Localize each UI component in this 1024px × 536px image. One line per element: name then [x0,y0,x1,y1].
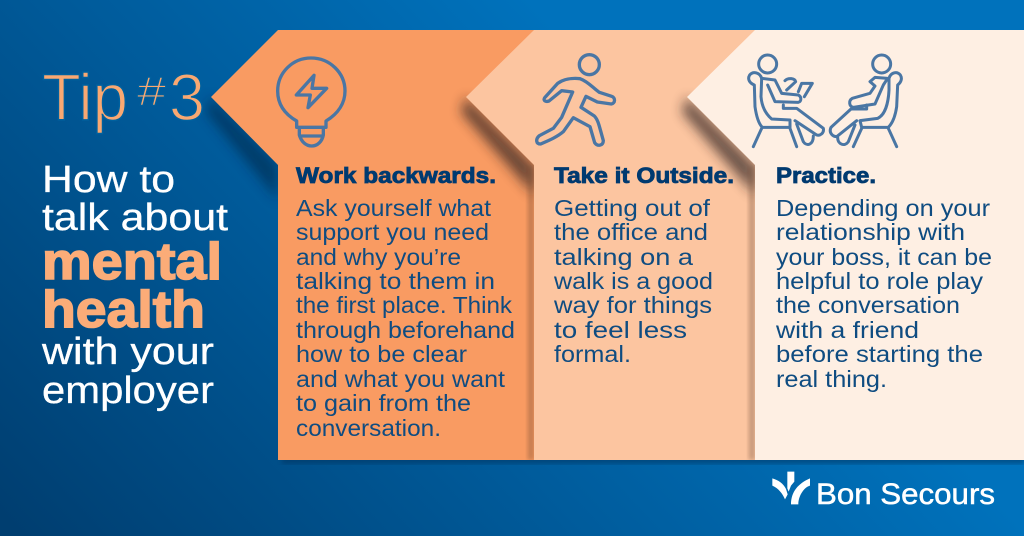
shadow of cream panel arrow [682,97,755,460]
text: work backwards: through beforehand [296,317,515,343]
text: practice: Depending on your [776,195,990,221]
icon: left seated person with notebook [749,55,823,147]
title: Tip #3: 3 [169,60,205,134]
text: practice: before starting the [776,341,983,367]
text: take it outside: the office and [554,219,708,245]
text: work backwards: Ask yourself what [296,195,491,221]
text: take it outside: to feel less [554,317,687,343]
text: work backwards: how to be clear [296,341,467,367]
heading: how to talk about mental health with your employer: health [42,281,205,339]
title: Tip #3 [42,60,205,134]
text: practice: the conversation [776,292,960,318]
panel: practice [687,30,1024,460]
text: work backwards: conversation. [296,415,441,441]
logo mark [772,472,810,504]
text: practice: relationship with [776,219,965,245]
shadow of peach panel arrow [461,97,534,460]
text: work backwards: to gain from the [296,390,471,416]
panel shadow below cards [281,460,1024,465]
shadow of orange panel arrow [206,97,278,200]
text: work backwards: and what you want [296,366,505,392]
logo: Bon Secours [772,472,995,511]
text: work backwards [296,163,515,441]
logo wordmark: Bon Secours [816,478,995,511]
text: take it outside: formal. [554,341,631,367]
text: practice: Practice. [776,163,876,188]
icon: two people seated in conversation [749,55,901,147]
text: take it outside: walk is a good [553,268,713,294]
heading: how to talk about mental health with your employer: employer [42,370,214,412]
text: take it outside: Getting out of [554,195,711,221]
heading: how to talk about mental health with your employer: How to [42,159,175,201]
text: work backwards: talking to them in [296,268,495,294]
title: Tip #3: # [137,68,166,114]
text: take it outside [553,163,734,367]
text: practice: your boss, it can be [776,244,992,270]
panel: take it outside [466,30,755,460]
text: practice [775,163,992,392]
text: practice: real thing. [776,366,887,392]
icon: light bulb with lightning bolt [278,58,345,146]
text: practice: helpful to role play [776,268,983,294]
text: take it outside: Take it Outside. [554,163,734,188]
text: practice: with a friend [775,317,919,343]
heading: how to talk about mental health with your employer: mental [42,233,222,291]
panel: work backwards [211,30,534,460]
text: take it outside: way for things [553,292,712,318]
heading: how to talk about mental health with your employer: talk about [42,197,228,239]
text: work backwards: support you need [296,219,489,245]
title: Tip #3: Tip [42,60,128,134]
icon: right seated person [830,55,901,147]
text: work backwards: Work backwards. [296,163,496,188]
heading: how to talk about mental health with your employer: with your [41,331,214,373]
text: work backwards: the first place. Think [296,292,512,318]
heading: how to talk about mental health with your employer [41,159,228,412]
icon: walking person [537,55,615,145]
text: work backwards: and why you’re [296,244,461,270]
text: take it outside: talking on a [554,244,694,270]
